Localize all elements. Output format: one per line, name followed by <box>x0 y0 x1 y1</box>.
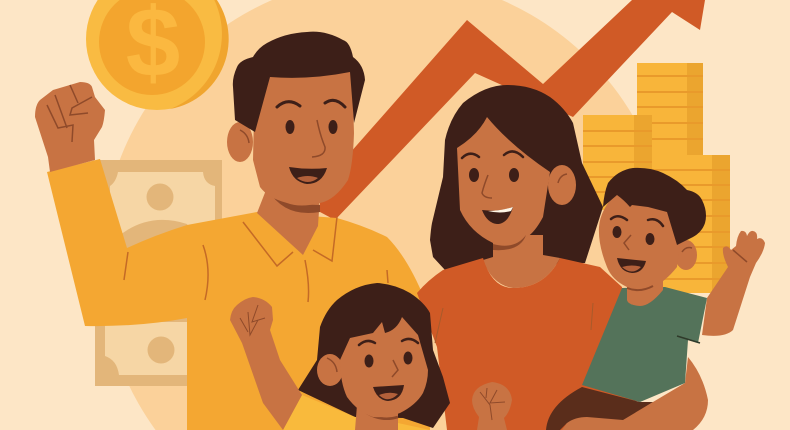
mother mouth <box>482 207 513 224</box>
father brows and nose <box>277 100 345 107</box>
father shirt <box>47 159 430 430</box>
mother brows and nose <box>462 151 523 158</box>
girl shirt <box>283 395 430 430</box>
mother ear <box>548 165 576 205</box>
bottom banknote <box>95 318 192 386</box>
background circle <box>101 0 673 430</box>
mother arm <box>562 357 708 430</box>
father face <box>253 70 354 206</box>
girl neck shadow <box>367 413 398 419</box>
boy neck <box>627 275 663 306</box>
father neck <box>257 185 320 255</box>
mother eyes <box>469 168 519 182</box>
mother neck shadow <box>493 235 526 250</box>
mother face <box>457 117 550 243</box>
girl face <box>340 317 428 417</box>
girl eyes <box>364 352 412 368</box>
father collar lines <box>243 217 337 266</box>
father hair <box>233 32 365 132</box>
father neck shadow <box>268 190 320 213</box>
mother top folds <box>435 303 593 343</box>
girl hair <box>298 283 450 428</box>
boy hair <box>603 168 706 245</box>
girl <box>230 283 450 430</box>
girl second fist <box>472 382 512 430</box>
middle coin stack <box>583 115 652 210</box>
mother top <box>417 258 640 430</box>
banknotes <box>95 160 222 386</box>
boy brows and nose <box>611 216 663 226</box>
girl ear <box>317 354 343 386</box>
father mouth <box>289 167 327 184</box>
tall coin stack <box>637 63 703 155</box>
girl brows and nose <box>359 339 418 345</box>
girl neck <box>355 405 398 430</box>
father <box>35 32 430 430</box>
icon: dollar coin <box>86 0 229 110</box>
boy face <box>599 192 680 288</box>
father ear <box>227 122 253 162</box>
boy shirt <box>582 287 707 402</box>
mother hair <box>430 85 603 270</box>
boy neck shadow <box>627 286 653 290</box>
boy ear <box>675 240 697 270</box>
mother <box>417 85 640 430</box>
boy mouth <box>617 258 646 273</box>
father shirt fold lines <box>124 245 388 302</box>
growth arrow <box>320 0 705 220</box>
mother neck <box>483 235 560 288</box>
boy eyes <box>612 226 654 245</box>
boy <box>582 168 765 402</box>
right coin stack <box>640 155 730 293</box>
father eyes <box>286 120 338 134</box>
father fist <box>35 82 105 172</box>
coin stacks <box>583 63 730 293</box>
top banknote <box>100 160 222 250</box>
girl raised arm and fist <box>230 297 302 430</box>
girl mouth <box>373 385 404 401</box>
boy raised arm <box>702 231 765 336</box>
boy shorts <box>546 387 653 430</box>
